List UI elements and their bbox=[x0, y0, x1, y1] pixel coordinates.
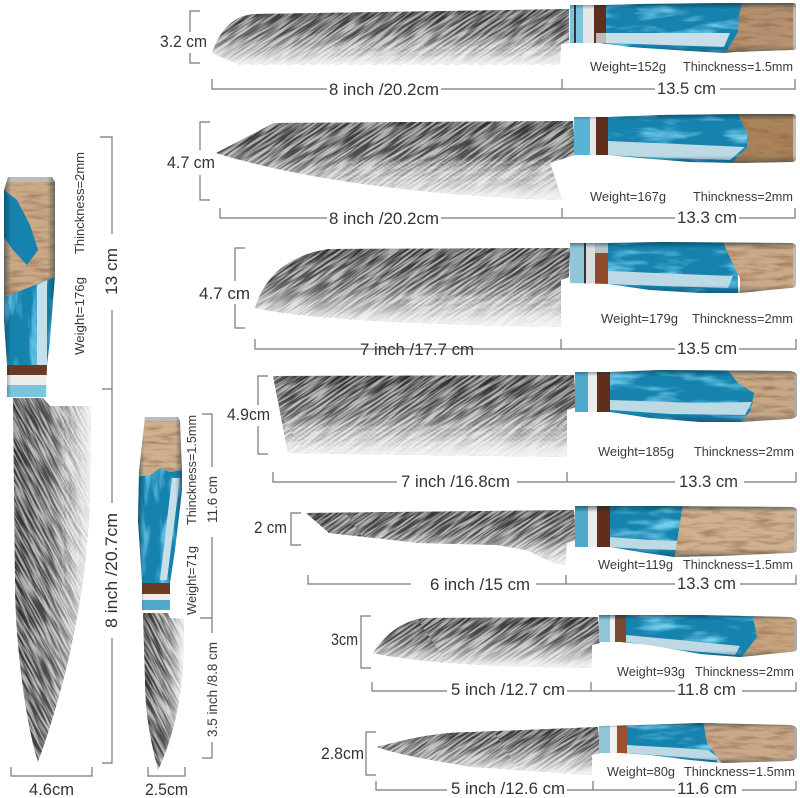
height label: 3cm bbox=[331, 631, 358, 649]
height dimension bbox=[366, 732, 376, 775]
weight: Weight=71g bbox=[185, 546, 199, 615]
handle length: 11.6 cm bbox=[677, 780, 737, 798]
knife: boning bbox=[254, 506, 797, 590]
height dimension bbox=[190, 11, 200, 63]
knife: bread knife bbox=[160, 0, 796, 99]
weight: Weight=179g bbox=[601, 312, 678, 326]
knife: vertical paring knife bbox=[138, 413, 217, 795]
blade bbox=[143, 613, 185, 771]
thickness: Thinckness=2mm bbox=[695, 665, 794, 679]
height dimension bbox=[361, 616, 371, 668]
handle bbox=[575, 506, 797, 557]
length dimension bbox=[255, 339, 796, 349]
handle bbox=[570, 3, 796, 53]
handle length: 11.8 cm bbox=[677, 681, 736, 699]
weight: Weight=176g bbox=[73, 277, 87, 355]
handle bbox=[138, 417, 182, 610]
handle length: 13.3 cm bbox=[679, 473, 738, 491]
length dimension bbox=[220, 208, 795, 218]
length dimension bbox=[273, 472, 796, 482]
weight: Weight=119g bbox=[598, 558, 673, 572]
height dimension bbox=[291, 513, 301, 545]
handle bbox=[4, 177, 55, 397]
length dimension bbox=[212, 79, 795, 89]
blade bbox=[216, 120, 576, 201]
width dimension bbox=[11, 767, 92, 776]
height label: 2.8cm bbox=[321, 745, 364, 763]
blade length: 3.5 inch /8.8 cm bbox=[205, 642, 220, 737]
knife: utility bbox=[321, 720, 797, 798]
weight: Weight=152g bbox=[590, 60, 666, 74]
height dimension bbox=[258, 376, 268, 454]
blade length: 7 inch /17.7 cm bbox=[360, 341, 474, 359]
weight: Weight=167g bbox=[590, 190, 666, 204]
handle length: 13.3 cm bbox=[677, 209, 737, 227]
handle bbox=[575, 370, 797, 422]
height dimension bbox=[235, 248, 245, 328]
handle bbox=[574, 114, 796, 163]
knife: kiritsuke bbox=[167, 110, 796, 228]
height dimension bbox=[200, 122, 210, 200]
knife: vertical chef knife bbox=[0, 137, 121, 798]
blade length: 7 inch /16.8cm bbox=[401, 473, 510, 491]
height label: 2 cm bbox=[254, 519, 287, 537]
knife: small santoku bbox=[332, 615, 797, 695]
blade bbox=[273, 375, 577, 458]
thickness: Thinckness=1.5mm bbox=[185, 415, 199, 525]
blade length: 5 inch /12.6 cm bbox=[451, 780, 565, 798]
height label: 3.2 cm bbox=[160, 33, 207, 51]
handle bbox=[599, 723, 797, 763]
length dimension bbox=[376, 781, 796, 790]
blade length: 5 inch /12.7 cm bbox=[451, 681, 565, 699]
thickness: Thinckness=2mm bbox=[693, 190, 793, 204]
handle length: 11.6 cm bbox=[205, 476, 220, 523]
knife: nakiri bbox=[227, 365, 797, 491]
blade bbox=[255, 248, 571, 328]
handle length: 13.3 cm bbox=[677, 575, 736, 593]
thickness: Thinckness=2mm bbox=[692, 312, 793, 326]
blade length: 8 inch /20.2cm bbox=[329, 81, 439, 99]
height label: 4.7 cm bbox=[199, 285, 250, 303]
blade length: 8 inch /20.2cm bbox=[329, 210, 439, 228]
blade length: 6 inch /15 cm bbox=[430, 576, 530, 594]
thickness: Thinckness=1.5mm bbox=[683, 558, 793, 572]
handle length: 13.5 cm bbox=[677, 340, 737, 358]
blade bbox=[13, 398, 92, 763]
handle bbox=[570, 242, 796, 293]
length dimension bbox=[372, 682, 796, 691]
handle length: 13 cm bbox=[103, 248, 121, 295]
thickness: Thinckness=2mm bbox=[73, 152, 87, 254]
weight: Weight=93g bbox=[617, 665, 685, 679]
handle length: 13.5 cm bbox=[657, 80, 716, 98]
handle bbox=[599, 615, 797, 657]
blade bbox=[377, 727, 601, 776]
blade bbox=[373, 617, 601, 669]
thickness: Thinckness=2mm bbox=[694, 445, 794, 459]
height label: 4.7 cm bbox=[167, 154, 215, 172]
height label: 4.9cm bbox=[227, 406, 270, 424]
height dimension line bbox=[200, 414, 212, 758]
width dimension bbox=[148, 767, 185, 776]
thickness: Thinckness=1.5mm bbox=[683, 60, 793, 74]
height dimension line bbox=[100, 137, 112, 763]
blade bbox=[212, 9, 570, 67]
knife: santoku bbox=[199, 235, 796, 359]
thickness: Thinckness=1.5mm bbox=[684, 765, 795, 779]
weight: Weight=185g bbox=[598, 445, 674, 459]
blade bbox=[306, 510, 577, 566]
blade length: 8 inch /20.7cm bbox=[103, 513, 121, 628]
weight: Weight=80g bbox=[607, 765, 675, 779]
length dimension bbox=[308, 575, 796, 584]
